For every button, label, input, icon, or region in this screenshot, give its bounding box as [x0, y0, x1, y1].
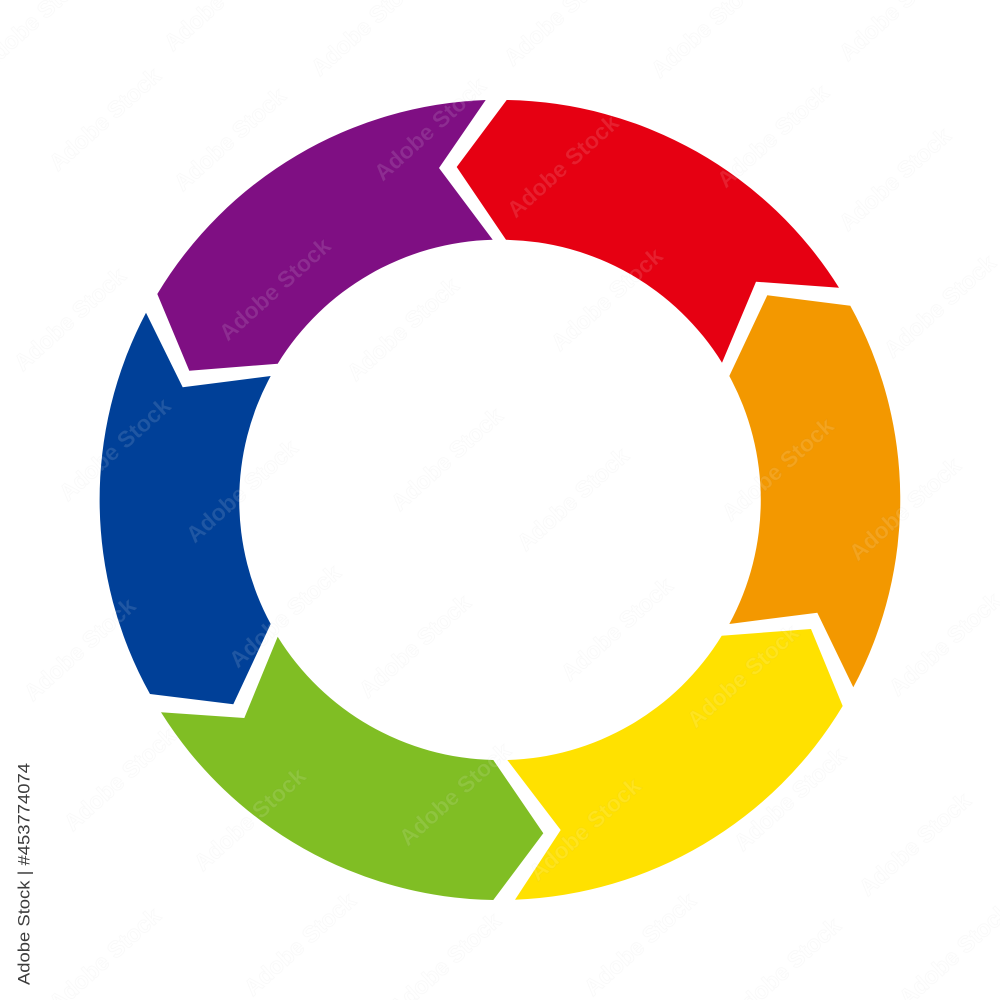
- watermark: repeated stock text: Adobe Stock: [369, 72, 491, 186]
- watermark: repeated stock text: Adobe Stock: [354, 589, 476, 703]
- watermark: repeated stock text: Adobe Stock: [54, 392, 176, 506]
- watermark: repeated stock text: Adobe Stock: [729, 742, 851, 856]
- watermark: repeated stock text: Adobe Stock: [59, 722, 181, 836]
- watermark: repeated stock text: Adobe Stock: [712, 79, 834, 193]
- arrow segment: purple: [157, 100, 493, 371]
- watermark: repeated stock text: Adobe Stock: [717, 412, 839, 526]
- watermark: repeated stock text: Adobe Stock: [834, 122, 956, 236]
- watermark: repeated stock text: Adobe Stock: [579, 887, 701, 1000]
- watermark: repeated stock text: Adobe Stock: [682, 619, 804, 733]
- watermark: repeated stock text: Adobe Stock: [854, 787, 976, 901]
- watermark: repeated stock text: Adobe Stock: [394, 737, 516, 851]
- arrow segment: red: [457, 100, 839, 363]
- watermark: repeated stock text: Adobe Stock: [844, 452, 966, 566]
- watermark: repeated stock text: Adobe Stock: [224, 559, 346, 673]
- watermark: repeated stock text: Adobe Stock: [524, 772, 646, 886]
- watermark: repeated stock text: Adobe Stock: [546, 242, 668, 356]
- watermark: repeated stock text: Adobe Stock: [386, 402, 508, 516]
- watermark: repeated stock text: Adobe Stock: [239, 887, 361, 1000]
- watermark: repeated stock text: Adobe Stock: [502, 109, 624, 223]
- arrow segment: blue: [100, 313, 271, 704]
- watermark: repeated stock text: Adobe Stock: [44, 62, 166, 176]
- ring of six arrow segments: [100, 100, 900, 900]
- watermark: repeated stock text: Adobe Stock: [19, 592, 141, 706]
- watermark: repeated stock text: Adobe Stock: [214, 232, 336, 346]
- watermark: repeated stock text: Adobe Stock: [879, 249, 1000, 363]
- watermark: repeated stock text: Adobe Stock: [189, 762, 311, 876]
- arrow segment: orange: [729, 295, 900, 687]
- watermark: repeated stock text: Adobe Stock: [181, 434, 303, 548]
- arrow segment: yellow: [507, 629, 843, 900]
- watermark: repeated stock text: Adobe Stock: [169, 82, 291, 196]
- watermark: repeated stock text: Adobe Stock: [9, 262, 131, 376]
- watermark: repeated stock text: Adobe Stock: [556, 572, 678, 686]
- arrow segment: green: [161, 637, 543, 900]
- watermark: repeated stock text: Adobe Stock: [512, 442, 634, 556]
- watermark: repeated stock text: Adobe Stock: [342, 272, 464, 386]
- side credit text: Adobe Stock | #453774074: [16, 763, 34, 985]
